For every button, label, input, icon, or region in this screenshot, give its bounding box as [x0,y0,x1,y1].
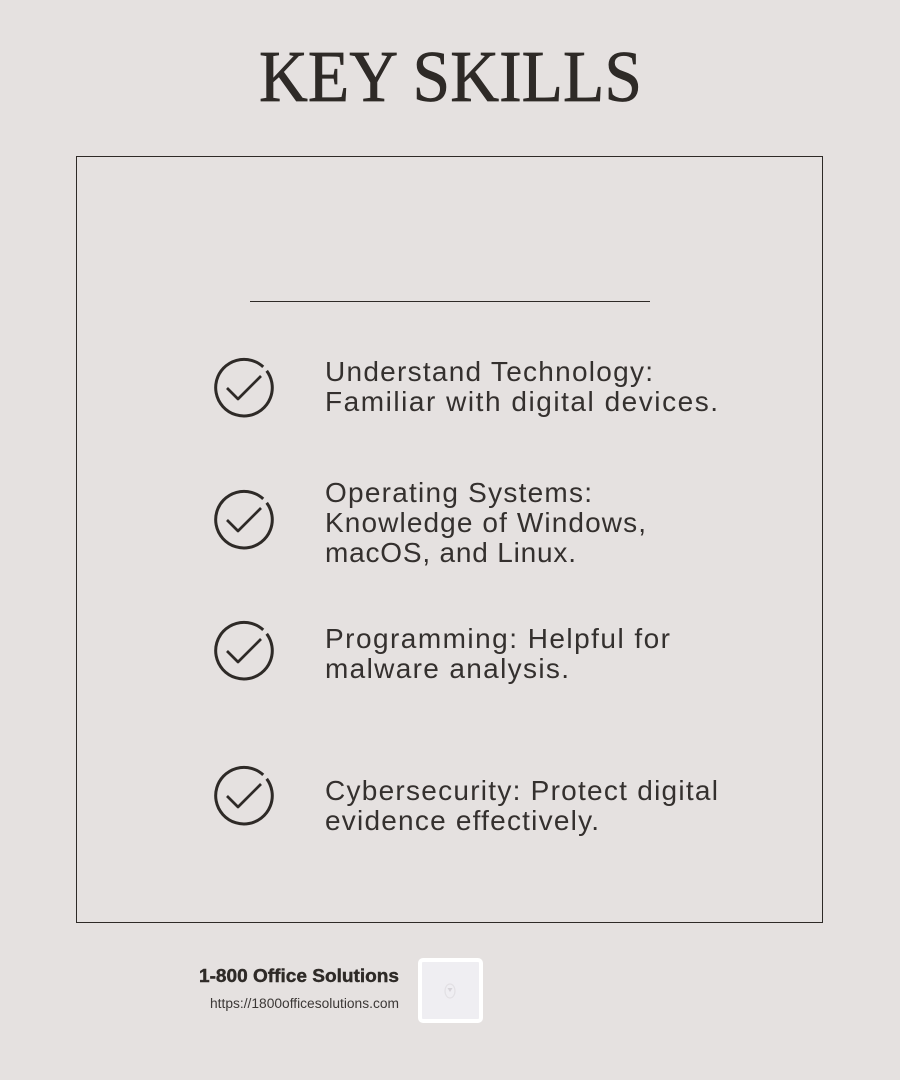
skill 4 text: evidence effectively. [325,805,599,836]
divider line [250,301,650,302]
skill 4 text [325,775,718,836]
icon: check circle 1 [216,359,272,416]
footer url: https://1800officesolutions.com [210,996,399,1011]
panel: skills frame [76,156,822,922]
skill 1 text [325,356,718,417]
skill 3 text: malware analysis. [325,653,569,684]
icon: check circle 4 [216,767,272,824]
skill 3 text: Programming: Helpful for [325,623,670,654]
skill 4 text: Cybersecurity: Protect digital [325,775,718,806]
title: KEY SKILLS [259,36,642,117]
footer company name: 1-800 Office Solutions [199,965,399,986]
skill 1 text: Familiar with digital devices. [325,386,718,417]
skill 2 text: Knowledge of Windows, [325,507,646,538]
skill 3 text [325,623,670,684]
skill 2 text: macOS, and Linux. [325,537,576,568]
icon: check circle 3 [216,622,272,679]
icon: check circle 2 [216,491,272,548]
logo tile [420,960,481,1021]
skill 2 text [325,477,646,568]
skill 1 text: Understand Technology: [325,356,653,387]
skill 2 text: Operating Systems: [325,477,592,508]
